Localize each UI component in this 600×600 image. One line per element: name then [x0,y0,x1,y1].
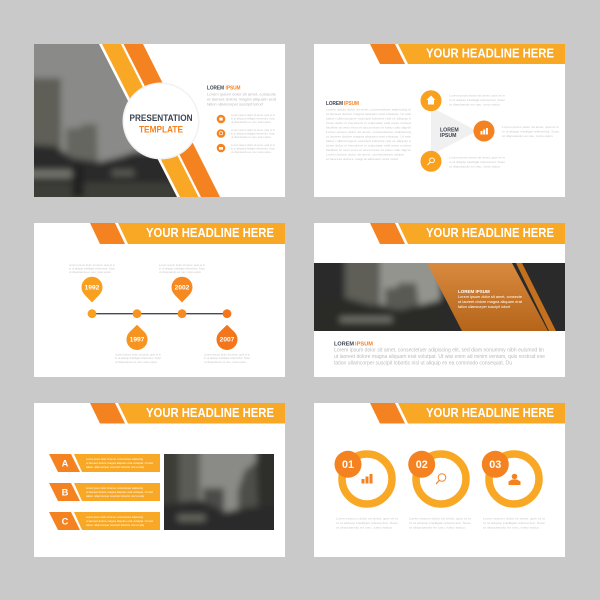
item A: ut laoreet dolore magna aliquam erat volutpat. Ut wisi [86,461,153,465]
timeline captions: in ut aliquip intelligat referrentur. Susc [115,356,161,360]
cover photo [34,44,177,197]
intro text [207,86,277,106]
orange stripe [516,263,556,331]
item B: ut laoreet dolore magna aliquam erat volutpat. Ut wisi [86,490,153,494]
pin 2002: 2002 [175,285,190,292]
header band [90,403,285,424]
intro text: LOREM [207,86,224,92]
diagonal yellow band [102,44,200,197]
icon list: Lorem ipsum dolor sit amet, quis et in [231,128,275,132]
icon: bars [474,120,494,142]
pin 1997: 1997 [130,337,145,344]
left text block: Lorem ipsum dolor sit amet, consectetuer adipis [326,152,405,156]
item C: tation ullamcorper suscipit lobortis nisl ut aliq [86,523,144,527]
icon: home [420,90,442,111]
timeline dots [88,309,231,318]
callout texts: Lorem ipsum dolor sit amet, quis et in [449,94,505,98]
header band: YOUR HEADLINE HERE [426,406,554,420]
callout texts: Lorem ipsum dolor sit amet, quis et in [502,125,559,129]
left text block [326,101,412,161]
timeline captions: ut disputando ex usu, iusto epicu [69,270,111,274]
callout texts: in ut aliquip intelligat referrentur. Susc [502,130,560,134]
icon list: in ut aliquip intelligat referrentur. Susc [231,146,275,150]
callout texts: ut disputando ex usu, iusto epicu [449,102,500,106]
pin 1992: 1992 [85,285,100,292]
icon list: ut disputando ex usu, iusto epicu [231,135,271,139]
icon list: in ut aliquip intelligat referrentur. Susc [231,116,275,120]
banner text [458,289,522,309]
header band [370,44,565,64]
title circle [122,82,200,160]
left text block: tation ullamcorper suscipit lobortis nisl ut aliquip e [326,116,411,120]
left text block: facilisis at vero eros et accumsan et iusto odio dignis [326,126,412,130]
icon list: Lorem ipsum dolor sit amet, quis et in [231,143,275,147]
panel: timeline slide [34,223,285,377]
item B: Lorem ipsum dolor sit amet, consectetuer adipiscing [86,486,143,490]
intro text: Lorem ipsum dolor sit amet, consecte [207,92,277,96]
body text: IPSUM [355,342,374,348]
header band [370,223,565,244]
pin 2002 [172,277,193,302]
callout texts: in ut aliquip intelligat referrentur. Susc [449,98,506,102]
panel: ABC list slide [34,403,285,557]
timeline captions: ut disputando ex usu, iusto epicu [204,360,246,364]
banner photo [314,263,565,331]
callout texts: in ut aliquip intelligat referrentur. Susc [449,160,506,164]
item C: C [62,516,69,526]
timeline captions: Lorem ipsum dolor sit amet, quis et in [69,263,115,267]
timeline captions: ut disputando ex usu, iusto epicu [115,360,157,364]
ring captions [336,516,546,530]
body text: tation ullamcorper suscipit lobortis nisl ut aliquip ex ea commodo consequat. Du [334,360,512,366]
body text: ut laoreet dolore magna aliquam erat volutpat. Ut wisi enim ad minim veniam, quis nostrud exe [334,354,545,360]
callout texts: ut disputando ex usu, iusto epicu [449,164,500,168]
item A: Lorem ipsum dolor sit amet, consectetuer adipiscing [86,457,143,461]
item C [49,512,160,530]
icon list [217,113,275,154]
left text block: ut laoreet dolore magna aliquam erat volut [326,157,398,161]
item B [49,483,160,501]
ring captions: Lorem ipsum dolor sit amet, quis et in [409,516,471,520]
ring captions: Lorem ipsum dolor sit amet, quis et in [483,516,545,520]
ring captions: ut disputando ex usu, iusto epicu [483,526,539,530]
header band [370,403,565,424]
timeline captions: Lorem ipsum dolor sit amet, quis et in [115,352,161,356]
banner text: Lorem ipsum dolor sit amet, consecte [458,295,522,299]
body text: LOREM [334,342,355,348]
left text block: facilisis at vero eros et accumsan et iusto odio dignis [326,148,412,152]
left text block: iriure dolor in hendrerit in vulputate velit esse molest [326,121,411,125]
ring captions: in ut aliquip intelligat referrentur. Susc [409,521,472,525]
left text block: tation ullamcorper suscipit lobortis nisl ut aliquip e [326,139,411,143]
item C: ut laoreet dolore magna aliquam erat volutpat. Ut wisi [86,519,153,523]
callout texts: ut disputando ex usu, iusto epicu [502,134,553,138]
header band: YOUR HEADLINE HERE [426,226,554,240]
left text block: ut laoreet dolore magna aliquam erat volutpat. Ut wisi [326,134,411,138]
body text [334,342,545,366]
timeline captions: in ut aliquip intelligat referrentur. Susc [159,266,205,270]
ring 02: 02 [416,459,428,471]
left text block: Lorem ipsum dolor sit amet, consectetuer adipiscing el [326,108,411,112]
intro text: IPSUM [226,86,241,92]
left text block: IPSUM [344,101,359,107]
panel: cover slide [34,44,285,197]
pin 1992 [82,277,103,302]
central triangle: IPSUM [440,133,456,139]
ring captions: ut disputando ex usu, iusto epicu [409,526,465,530]
timeline captions: ut disputando ex usu, iusto epicu [159,270,201,274]
timeline captions: in ut aliquip intelligat referrentur. Susc [69,266,115,270]
ring captions: Lorem ipsum dolor sit amet, quis et in [336,516,398,520]
title circle: TEMPLATE [139,124,184,136]
ring 01 [334,451,392,504]
timeline captions [69,263,250,364]
timeline captions: Lorem ipsum dolor sit amet, quis et in [204,352,250,356]
icon list: ut disputando ex usu, iusto epicu [231,150,271,154]
callout texts: Lorem ipsum dolor sit amet, quis et in [449,156,505,160]
left text block: ut laoreet dolore magna aliquam erat volutpat. Ut wisi [326,112,411,116]
ring captions: in ut aliquip intelligat referrentur. Susc [483,521,546,525]
panel: photo banner slide [314,223,565,377]
body text: Lorem ipsum dolor sit amet, consectetuer adipiscing elit, sed diam nonummy nibh euismod tin [334,348,544,354]
timeline captions: Lorem ipsum dolor sit amet, quis et in [159,263,205,267]
ring captions: in ut aliquip intelligat referrentur. Susc [336,521,399,525]
pin 2007 [217,325,238,350]
item A: tation ullamcorper suscipit lobortis nisl ut aliq [86,465,144,469]
item B: B [62,488,69,498]
left text block: LOREM [326,101,343,107]
header band [90,223,285,244]
title circle: PRESENTATION [130,113,193,124]
banner text: tation ullamcorper suscipit lobort [458,305,510,309]
central triangle: LOREM [440,128,459,134]
pin 1997 [126,325,148,350]
ring 01: 01 [342,459,354,471]
central triangle [431,107,477,155]
ring 03 [482,451,539,504]
icon list: in ut aliquip intelligat referrentur. Susc [231,132,275,136]
orange overlay [427,263,548,331]
header band: YOUR HEADLINE HERE [426,46,554,60]
timeline line [92,313,227,315]
item A: A [62,458,69,468]
callout texts [449,94,560,168]
header band: YOUR HEADLINE HERE [146,226,274,240]
icon list: ut disputando ex usu, iusto epicu [231,120,271,124]
timeline captions: in ut aliquip intelligat referrentur. Susc [204,356,250,360]
panel: triangle process slide [314,44,565,197]
intro text: ut laoreet dolore magna aliquam erat [207,96,277,102]
diagonal orange band [123,44,220,197]
pin 2007: 2007 [220,337,235,344]
item B: tation ullamcorper suscipit lobortis nisl ut aliq [86,494,144,498]
icon: search [420,151,442,172]
ring captions: ut disputando ex usu, iusto epicu [336,526,392,530]
banner text: LOREM IPSUM [458,289,490,294]
intro text: tation ullamcorper suscipit lobort [207,102,264,106]
header band: YOUR HEADLINE HERE [146,406,274,420]
left text block: iriure dolor in hendrerit in vulputate velit esse molest [326,144,411,148]
item A [49,454,160,472]
street photo [164,454,274,530]
ring 03: 03 [489,459,501,471]
icon list: Lorem ipsum dolor sit amet, quis et in [231,113,275,117]
banner text: ut laoreet dolore magna aliquam erat [458,300,522,304]
left text block: Lorem ipsum dolor sit amet, consectetuer adipiscing [326,130,411,134]
panel: numbered rings slide [314,403,565,557]
ring 02 [408,451,466,504]
item C: Lorem ipsum dolor sit amet, consectetuer adipiscing [86,515,143,519]
